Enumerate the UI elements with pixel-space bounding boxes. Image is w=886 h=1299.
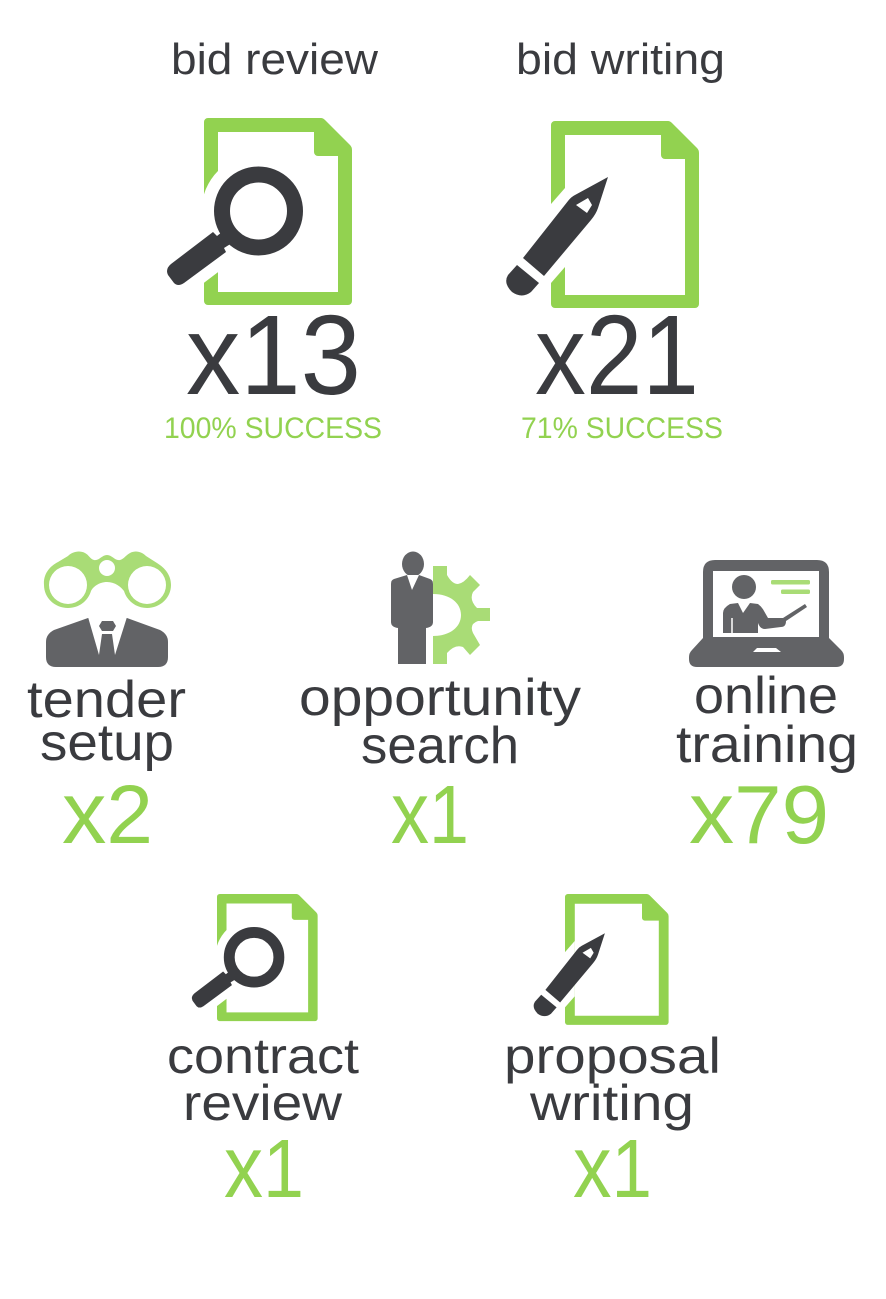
count: x2: x2 <box>62 763 153 862</box>
count: x1: x1 <box>573 1117 652 1216</box>
panel: bid writing <box>506 35 725 445</box>
label: contract review: review <box>183 1075 343 1131</box>
icon: laptop with presenter <box>689 560 844 667</box>
panel: tender setup <box>27 552 186 862</box>
label: proposal writing: proposal <box>504 1028 721 1084</box>
panel: contract review <box>167 894 359 1216</box>
icon: document with pencil <box>506 121 699 308</box>
label: online training <box>676 667 858 774</box>
label: proposal writing <box>504 1028 721 1131</box>
label: tender setup: setup <box>40 714 174 772</box>
success rate: 100% success: 100% SUCCESS <box>164 412 382 445</box>
panel: online training <box>676 560 858 862</box>
panel: proposal writing <box>504 894 721 1216</box>
panel: bid review <box>164 35 382 445</box>
icon: document with magnifier <box>167 118 352 305</box>
panel: opportunity search <box>299 552 581 862</box>
heading: bid review: bid review <box>171 35 378 84</box>
icon: binoculars and suit <box>44 552 171 667</box>
label: opportunity search <box>299 669 581 775</box>
heading: bid writing: bid writing <box>516 35 725 84</box>
count: x13: x13 <box>186 292 361 418</box>
icon: small document with magnifier <box>192 894 318 1021</box>
label: online training: online <box>694 667 838 725</box>
count: x21: x21 <box>535 292 699 418</box>
label: online training: training <box>676 716 858 774</box>
count: x79: x79 <box>689 763 829 862</box>
count: x1: x1 <box>391 763 469 862</box>
icon: person and gear <box>391 552 490 664</box>
label: contract review: contract <box>167 1028 359 1084</box>
icon: small document with pencil <box>534 894 669 1025</box>
label: contract review <box>167 1028 359 1131</box>
label: tender setup: tender <box>27 671 186 729</box>
success rate: 71% success: 71% SUCCESS <box>521 412 723 445</box>
label: proposal writing: writing <box>529 1075 694 1131</box>
label: tender setup <box>27 671 186 772</box>
count: x1: x1 <box>224 1117 304 1216</box>
label: opportunity search: search <box>361 717 519 775</box>
label: opportunity search: opportunity <box>299 669 581 727</box>
